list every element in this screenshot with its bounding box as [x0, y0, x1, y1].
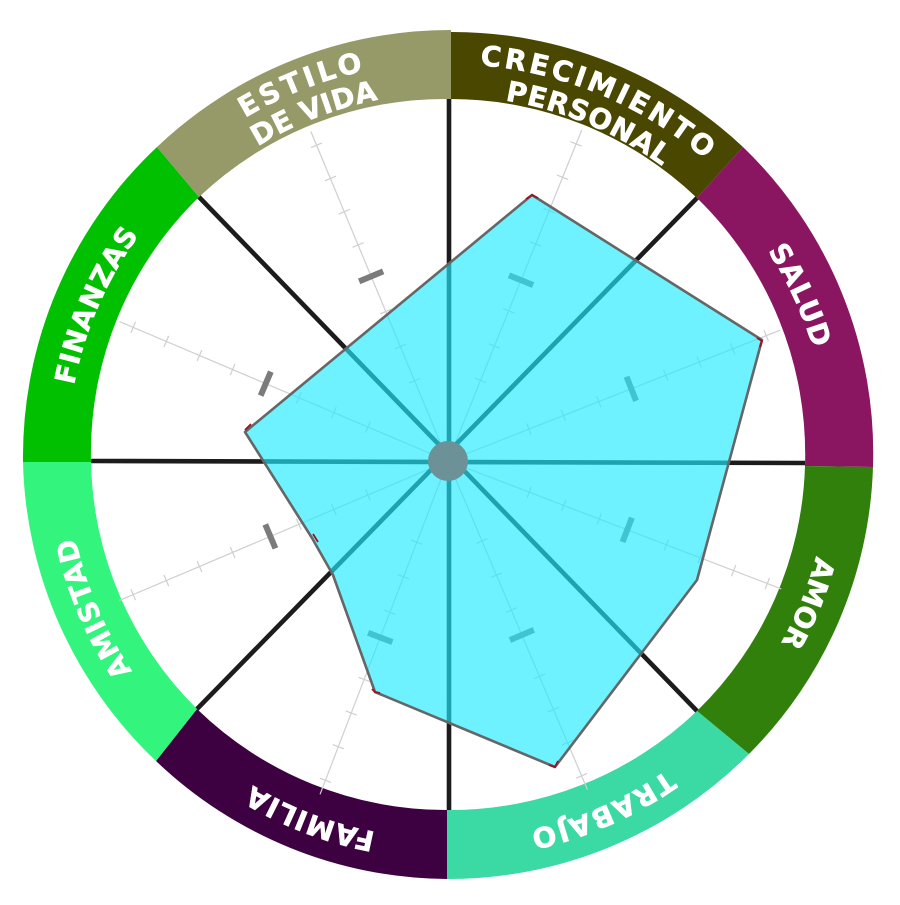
- scale axes with tick marks: [117, 128, 783, 796]
- segment: amor: [697, 466, 873, 754]
- segment: finanzas: [23, 147, 199, 462]
- label: salud: SALUD: [770, 244, 830, 345]
- center hub: [428, 441, 468, 481]
- label: finanzas: FINANZAS: [54, 226, 136, 384]
- label: trabajo: TRABAJO: [534, 774, 678, 848]
- label: estilo de vida: DE VIDA: [249, 81, 378, 146]
- label: estilo de vida: [236, 53, 378, 146]
- vertex marks: [245, 195, 762, 767]
- segment: estilo de vida: [157, 30, 451, 197]
- segment: trabajo: [447, 711, 749, 879]
- segment: crecimiento personal: [451, 32, 743, 198]
- radar polygon: [245, 195, 762, 767]
- spokes dividing the wheel: [91, 99, 805, 810]
- segment: amistad: [23, 462, 197, 761]
- segment: familia: [156, 709, 447, 879]
- label: crecimiento personal: CRECIMIENTO: [482, 46, 714, 155]
- label: crecimiento personal: PERSONAL: [507, 80, 666, 166]
- midpoint marks on the axes: [261, 271, 636, 642]
- label: amor: AMOR: [781, 556, 834, 648]
- label: estilo de vida: ESTILO: [236, 53, 360, 117]
- label: amistad: AMISTAD: [58, 540, 132, 676]
- label: familia: FAMILIA: [249, 785, 374, 852]
- segment: salud: [697, 147, 873, 467]
